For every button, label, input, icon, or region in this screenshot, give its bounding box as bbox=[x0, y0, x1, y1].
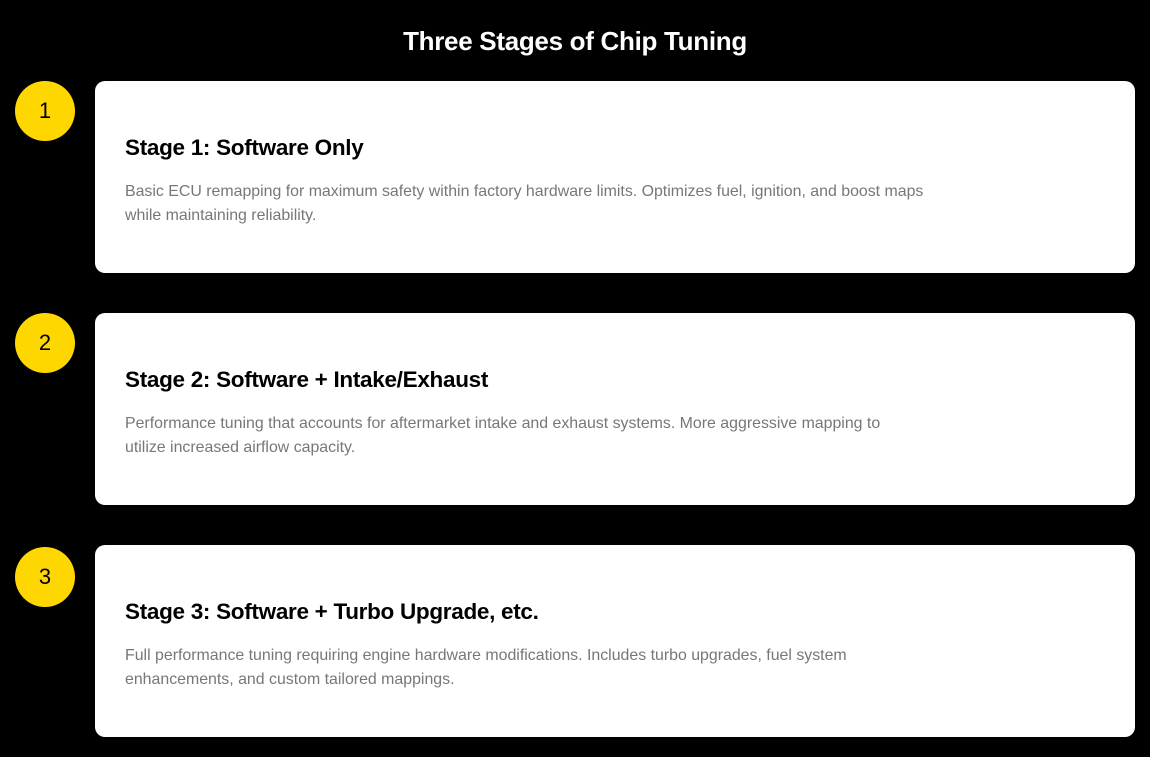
heading: stage 3: Stage 3: Software + Turbo Upgrade, etc. bbox=[125, 599, 539, 624]
icon: stage 2 number: 2 bbox=[39, 330, 51, 355]
text: stage 1 description: Basic ECU remapping for maximum safety within factory hardware limits. Optimizes fuel, ignition, and boost maps bbox=[125, 183, 923, 200]
text: stage 2 description: utilize increased airflow capacity. bbox=[125, 439, 355, 456]
icon: stage 3 number: 3 bbox=[39, 564, 51, 589]
icon: stage 3 number bbox=[15, 547, 75, 607]
text: stage 3 description: enhancements, and custom tailored mappings. bbox=[125, 671, 454, 688]
panel: stage 2 bbox=[95, 313, 1135, 505]
text: stage 3 description bbox=[125, 647, 847, 688]
text: stage 2 description bbox=[125, 415, 880, 456]
text: stage 1 description bbox=[125, 183, 923, 224]
icon: stage 2 number bbox=[15, 313, 75, 373]
icon: stage 1 number: 1 bbox=[39, 98, 51, 123]
title: Three Stages of Chip Tuning bbox=[403, 26, 747, 56]
icon: stage 1 number bbox=[15, 81, 75, 141]
text: stage 3 description: Full performance tuning requiring engine hardware modifications. Includes turbo upgrades, fuel system bbox=[125, 647, 847, 664]
panel: stage 3 bbox=[95, 545, 1135, 737]
text: stage 1 description: while maintaining reliability. bbox=[125, 207, 316, 224]
text: stage 2 description: Performance tuning that accounts for aftermarket intake and exhaust systems. More aggressive mapping to bbox=[125, 415, 880, 432]
panel: stage 1 bbox=[95, 81, 1135, 273]
heading: stage 2: Stage 2: Software + Intake/Exhaust bbox=[125, 367, 488, 392]
heading: stage 1: Stage 1: Software Only bbox=[125, 135, 363, 160]
